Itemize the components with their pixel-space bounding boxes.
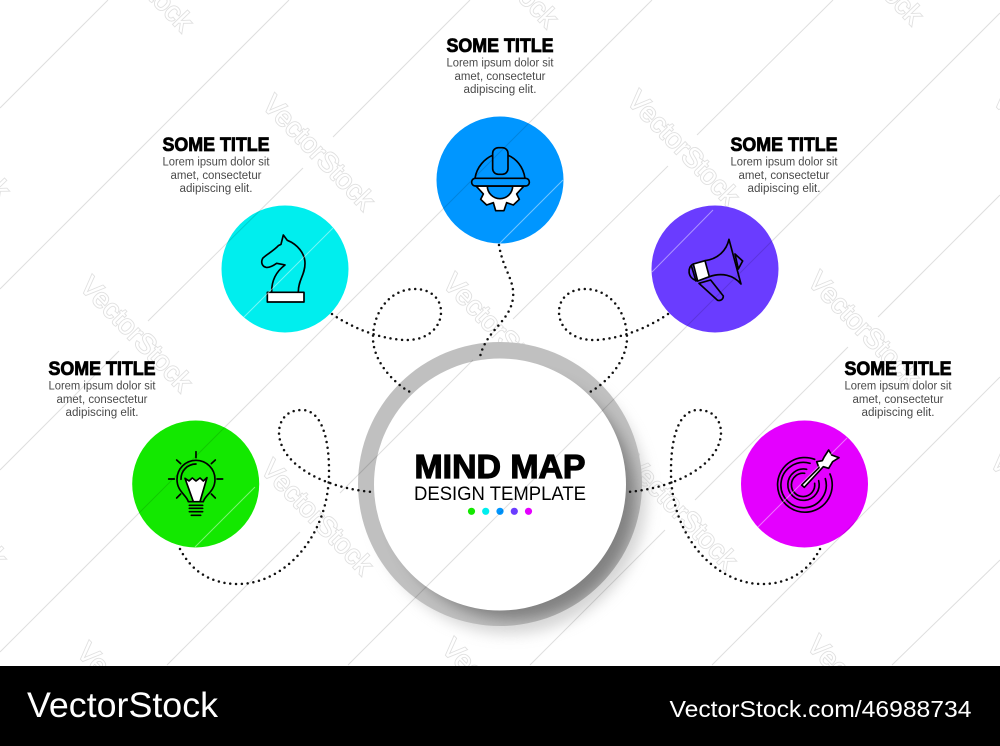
dotted connector: purple	[559, 289, 668, 392]
heading block: upper right: SOME TITLE	[730, 135, 838, 156]
central title: MIND MAP	[414, 448, 586, 485]
watermark text: VectorStock	[619, 448, 744, 575]
heading block: lower right: SOME TITLE	[844, 359, 952, 380]
heading block: top centre: SOME TITLE	[446, 36, 554, 57]
heading block: top centre: adipiscing elit.	[464, 84, 536, 96]
heading block: upper left	[162, 135, 270, 195]
footer bar	[0, 666, 1000, 746]
icon: helmet and gear	[472, 148, 529, 211]
heading block: top centre	[446, 36, 554, 96]
icon: megaphone	[689, 239, 743, 300]
heading block: lower right: adipiscing elit.	[862, 407, 934, 419]
heading block: upper left: adipiscing elit.	[180, 183, 252, 195]
watermark text: VectorStock	[74, 270, 199, 397]
node: cyan	[222, 206, 348, 332]
heading block: upper left: SOME TITLE	[162, 135, 270, 156]
heading block: upper right: amet, consectetur	[738, 170, 830, 182]
dotted connector: cyan	[332, 289, 441, 392]
node: blue	[436, 116, 564, 244]
watermark text: VectorStock	[802, 265, 927, 392]
node: magenta	[741, 420, 868, 548]
heading block: top centre: amet, consectetur	[454, 71, 546, 83]
node: purple	[652, 206, 778, 332]
heading block: lower left: SOME TITLE	[48, 359, 156, 380]
node: green	[132, 420, 259, 548]
central ring with shadow	[358, 342, 647, 634]
watermark text: VectorStock	[437, 267, 562, 394]
watermark text: VectorStock	[257, 89, 381, 216]
watermark text: VectorStock	[621, 84, 746, 211]
heading block: lower right	[844, 359, 952, 419]
heading block: lower left: Lorem ipsum dolor sit	[48, 380, 156, 392]
icon: light bulb	[169, 452, 223, 515]
heading block: upper left: amet, consectetur	[170, 170, 262, 182]
dotted connector: blue	[480, 245, 513, 357]
heading block: upper left: Lorem ipsum dolor sit	[162, 156, 270, 168]
heading block: lower left: amet, consectetur	[56, 394, 148, 406]
central title	[414, 448, 586, 505]
icon: chess knight	[262, 235, 305, 302]
heading block: lower right: amet, consectetur	[852, 394, 944, 406]
heading block: lower left: adipiscing elit.	[66, 407, 138, 419]
colour dots	[468, 508, 532, 515]
heading block: top centre: Lorem ipsum dolor sit	[446, 58, 554, 70]
icon: target and arrow	[778, 450, 839, 512]
heading block: upper right	[730, 135, 838, 195]
central title: DESIGN TEMPLATE	[414, 483, 586, 505]
heading block: lower right: Lorem ipsum dolor sit	[844, 380, 952, 392]
dotted connector: magenta	[628, 410, 820, 584]
watermark text: VectorStock	[255, 453, 380, 580]
dotted connector: green	[180, 410, 372, 584]
heading block: upper right: adipiscing elit.	[748, 183, 820, 195]
heading block: lower left	[48, 359, 156, 419]
footer logo: VectorStock	[27, 686, 219, 725]
heading block: upper right: Lorem ipsum dolor sit	[730, 156, 838, 168]
footer url: VectorStock.com/46988734	[670, 696, 972, 722]
